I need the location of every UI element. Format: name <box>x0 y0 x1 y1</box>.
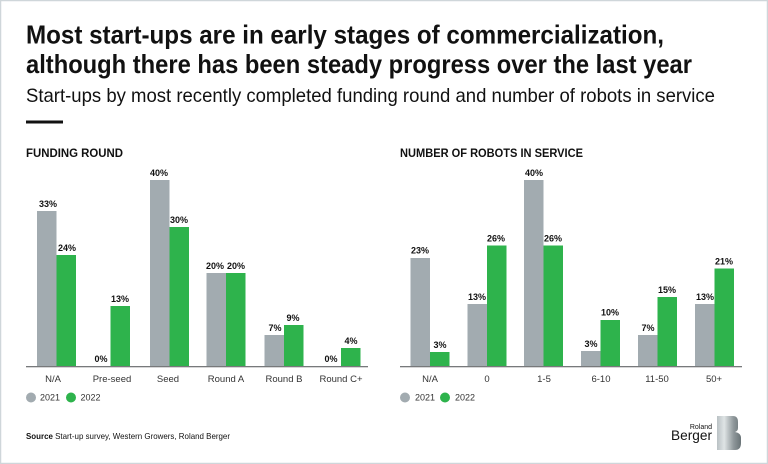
bar chart: funding round: Seed <box>157 374 179 385</box>
bar chart: robots in service: 0 <box>484 374 490 385</box>
legend: robots in service: 2022 <box>455 392 475 402</box>
bar chart: funding round: 0% <box>324 354 338 364</box>
bar chart: robots in service: 15% <box>658 285 676 295</box>
legend: funding round <box>26 392 101 402</box>
panel: number of robots in service <box>400 148 742 402</box>
subtitle: Start-ups by most recently completed funding round and number of robots in service <box>26 85 715 107</box>
bar chart: funding round: 33% <box>39 199 57 209</box>
bar chart: robots in service: 3% <box>584 339 598 349</box>
heading: number of robots: NUMBER OF ROBOTS IN SERVICE <box>400 148 583 160</box>
legend: funding round: 2021 <box>40 392 60 402</box>
bar chart: robots in service: 26% <box>544 234 562 244</box>
title <box>26 20 692 79</box>
bar chart: funding round: 24% <box>58 243 76 253</box>
bar chart: funding round: 20% <box>227 261 245 271</box>
bar chart: funding round: 0% <box>94 354 108 364</box>
bar chart: funding round: 9% <box>286 313 300 323</box>
heading: funding round: FUNDING ROUND <box>26 148 123 160</box>
legend: robots in service <box>400 392 475 402</box>
bar chart: robots in service: 11-50 <box>645 374 669 385</box>
bar chart: robots in service: 50+ <box>706 374 723 385</box>
bar chart: funding round: N/A <box>45 374 62 385</box>
bar chart: funding round: 13% <box>111 294 129 304</box>
logo: Roland Berger: Roland <box>690 424 712 431</box>
bar chart: robots in service: 40% <box>525 168 543 178</box>
accent rule <box>26 120 63 124</box>
bar chart: funding round: Pre-seed <box>93 374 131 385</box>
bar chart: robots in service: 13% <box>468 292 486 302</box>
bar chart: robots in service: 6-10 <box>591 374 611 385</box>
legend: funding round: 2022 <box>80 392 101 402</box>
bar chart: funding round: 20% <box>206 261 224 271</box>
title: although there has been steady progress over the last year <box>26 49 692 79</box>
logo: Roland Berger: Berger <box>671 427 712 443</box>
bar chart: funding round: 7% <box>268 323 282 333</box>
bar chart: robots in service: 10% <box>601 308 619 318</box>
bar chart: robots in service: 23% <box>411 246 429 256</box>
bar chart: funding round: Round B <box>266 374 302 385</box>
bar chart: robots in service: 26% <box>487 234 505 244</box>
source note: Source Start-up survey, Western Growers, Roland Berger <box>26 431 230 441</box>
bar chart: robots in service: 7% <box>641 323 655 333</box>
bar chart: robots in service <box>400 168 742 385</box>
bar chart: robots in service: 1-5 <box>537 374 551 385</box>
bar chart: funding round: 40% <box>150 168 168 178</box>
title: Most start-ups are in early stages of commercialization, <box>26 20 664 50</box>
bar chart: funding round: 4% <box>344 336 358 346</box>
bar chart: funding round: Round C+ <box>319 374 363 385</box>
bar chart: funding round <box>26 168 368 385</box>
logo: Roland Berger <box>671 416 741 450</box>
bar chart: funding round: Round A <box>208 374 245 385</box>
bar chart: robots in service: N/A <box>422 374 439 385</box>
bar chart: robots in service: 13% <box>696 292 714 302</box>
legend: robots in service: 2021 <box>415 392 435 402</box>
bar chart: robots in service: 3% <box>433 340 447 350</box>
bar chart: robots in service: 21% <box>715 256 733 266</box>
bar chart: funding round: 30% <box>170 215 188 225</box>
panel: funding round <box>26 148 368 402</box>
